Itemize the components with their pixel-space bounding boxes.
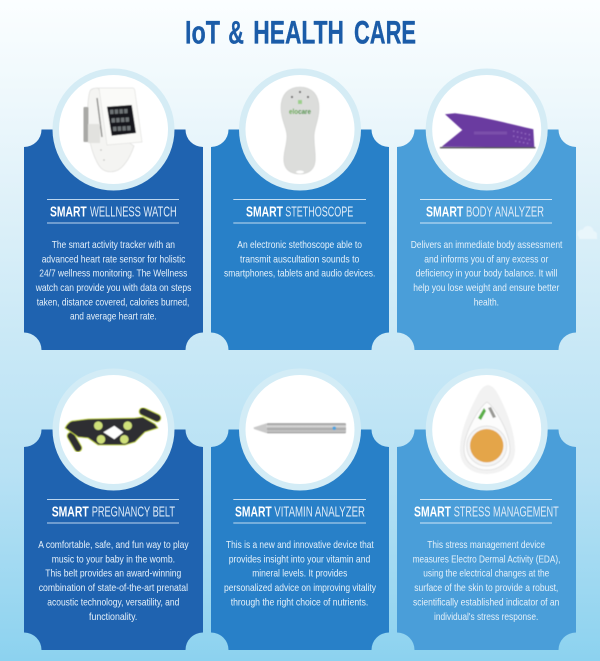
heading: smart stress management: SMART — [414, 504, 451, 521]
text: wellness watch description: The smart activity tracker with an — [52, 240, 175, 251]
heading: smart pregnancy belt: PREGNANCY BELT — [92, 504, 175, 521]
heading: smart stress management — [414, 500, 559, 523]
text: body analyzer description: health. — [474, 297, 499, 308]
text: wellness watch description: taken, distance covered, calories burned, — [37, 297, 189, 308]
text: stress management description: surface of the skin to provide a robust, — [414, 583, 558, 594]
icon: pregnancy belt — [65, 412, 158, 448]
heading: smart wellness watch — [47, 200, 179, 223]
text: pregnancy belt description: A comfortable, safe, and fun way to play — [38, 540, 189, 551]
text: vitamin analyzer description: This is a new and innovative device that — [226, 540, 374, 551]
title: IoT — [185, 14, 220, 50]
text: pregnancy belt description: acoustic technology, versatility, and — [47, 597, 180, 608]
panel: smart body analyzer — [397, 68, 576, 350]
text: body analyzer description: help you lose weight and ensure better — [413, 283, 560, 294]
heading: smart stethoscope: SMART — [246, 204, 283, 221]
icon: stress management device — [460, 385, 515, 474]
text: stethoscope description: An electronic stethoscope able to — [237, 240, 362, 251]
text: wellness watch description: watch can provide you with data on steps — [35, 283, 191, 294]
icon: stethoscope — [281, 87, 319, 174]
heading: smart body analyzer: BODY ANALYZER — [466, 204, 544, 221]
text: wellness watch description: advanced heart rate sensor for holistic — [42, 254, 185, 265]
text: vitamin analyzer description: mineral levels. It provides — [252, 569, 347, 580]
heading: smart vitamin analyzer: SMART — [235, 504, 272, 521]
text: pregnancy belt description: combination of state-of-the-art prenatal — [39, 583, 188, 594]
heading: smart wellness watch: SMART — [50, 204, 87, 221]
icon: stethoscope: elocare — [289, 109, 311, 116]
text: pregnancy belt description: functionality. — [89, 612, 137, 623]
text: wellness watch description: and average heart rate. — [70, 312, 157, 323]
heading: smart body analyzer — [420, 200, 552, 223]
heading: smart stethoscope: STETHOSCOPE — [285, 204, 353, 221]
panel: smart vitamin analyzer — [211, 368, 389, 650]
text: stethoscope description: smartphones, tablets and audio devices. — [224, 269, 375, 280]
icon: wellness watch — [84, 88, 142, 172]
heading: smart vitamin analyzer: VITAMIN ANALYZER — [274, 504, 365, 521]
title: CARE — [354, 14, 416, 50]
heading: smart body analyzer: SMART — [426, 204, 463, 221]
text: stethoscope description — [224, 240, 375, 280]
text: wellness watch description — [35, 240, 191, 323]
icon: cloud — [578, 226, 597, 239]
heading: smart wellness watch: WELLNESS WATCH — [90, 204, 177, 221]
text: body analyzer description — [411, 240, 563, 308]
text: stress management description: This stress management device — [427, 540, 545, 551]
text: stress management description: measures Electro Dermal Activity (EDA), — [413, 554, 560, 565]
text: stress management description: individual's stress response. — [434, 612, 538, 623]
text: pregnancy belt description: This belt provides an award-winning — [45, 569, 182, 580]
text: wellness watch description: 24/7 wellness monitoring. The Wellness — [39, 269, 187, 280]
panel: smart pregnancy belt — [24, 368, 203, 650]
text: stress management description — [413, 540, 560, 623]
text: vitamin analyzer description: through the right choice of nutrients. — [231, 597, 368, 608]
panel: smart wellness watch — [24, 68, 203, 350]
title: & — [228, 14, 244, 50]
icon: vitamin analyzer pen — [254, 423, 346, 433]
title — [185, 14, 416, 50]
text: pregnancy belt description: music to your baby in the womb. — [52, 554, 175, 565]
panel: smart stethoscope — [211, 68, 389, 350]
heading: smart stethoscope — [233, 200, 366, 223]
text: vitamin analyzer description: provides insight into your vitamin and — [229, 554, 371, 565]
text: stress management description: using the electrical changes at the — [423, 569, 550, 580]
text: stress management description: scientifically established indicator of an — [413, 597, 559, 608]
text: pregnancy belt description — [38, 540, 189, 623]
title: HEALTH — [253, 14, 344, 50]
heading: smart pregnancy belt: SMART — [52, 504, 89, 521]
text: vitamin analyzer description: personalized advice on improving vitality — [224, 583, 377, 594]
text: body analyzer description: and informs you of any excess or — [424, 254, 549, 265]
text: body analyzer description: Delivers an immediate body assessment — [411, 240, 563, 251]
panel: smart stress management — [397, 368, 576, 650]
text: body analyzer description: deficiency in your body balance. It will — [416, 269, 557, 280]
heading: smart pregnancy belt — [47, 500, 179, 523]
icon: body analyzer — [440, 113, 536, 148]
text: vitamin analyzer description — [224, 540, 377, 608]
heading: smart vitamin analyzer — [233, 500, 366, 523]
text: stethoscope description: transmit auscultation sounds to — [240, 254, 360, 265]
